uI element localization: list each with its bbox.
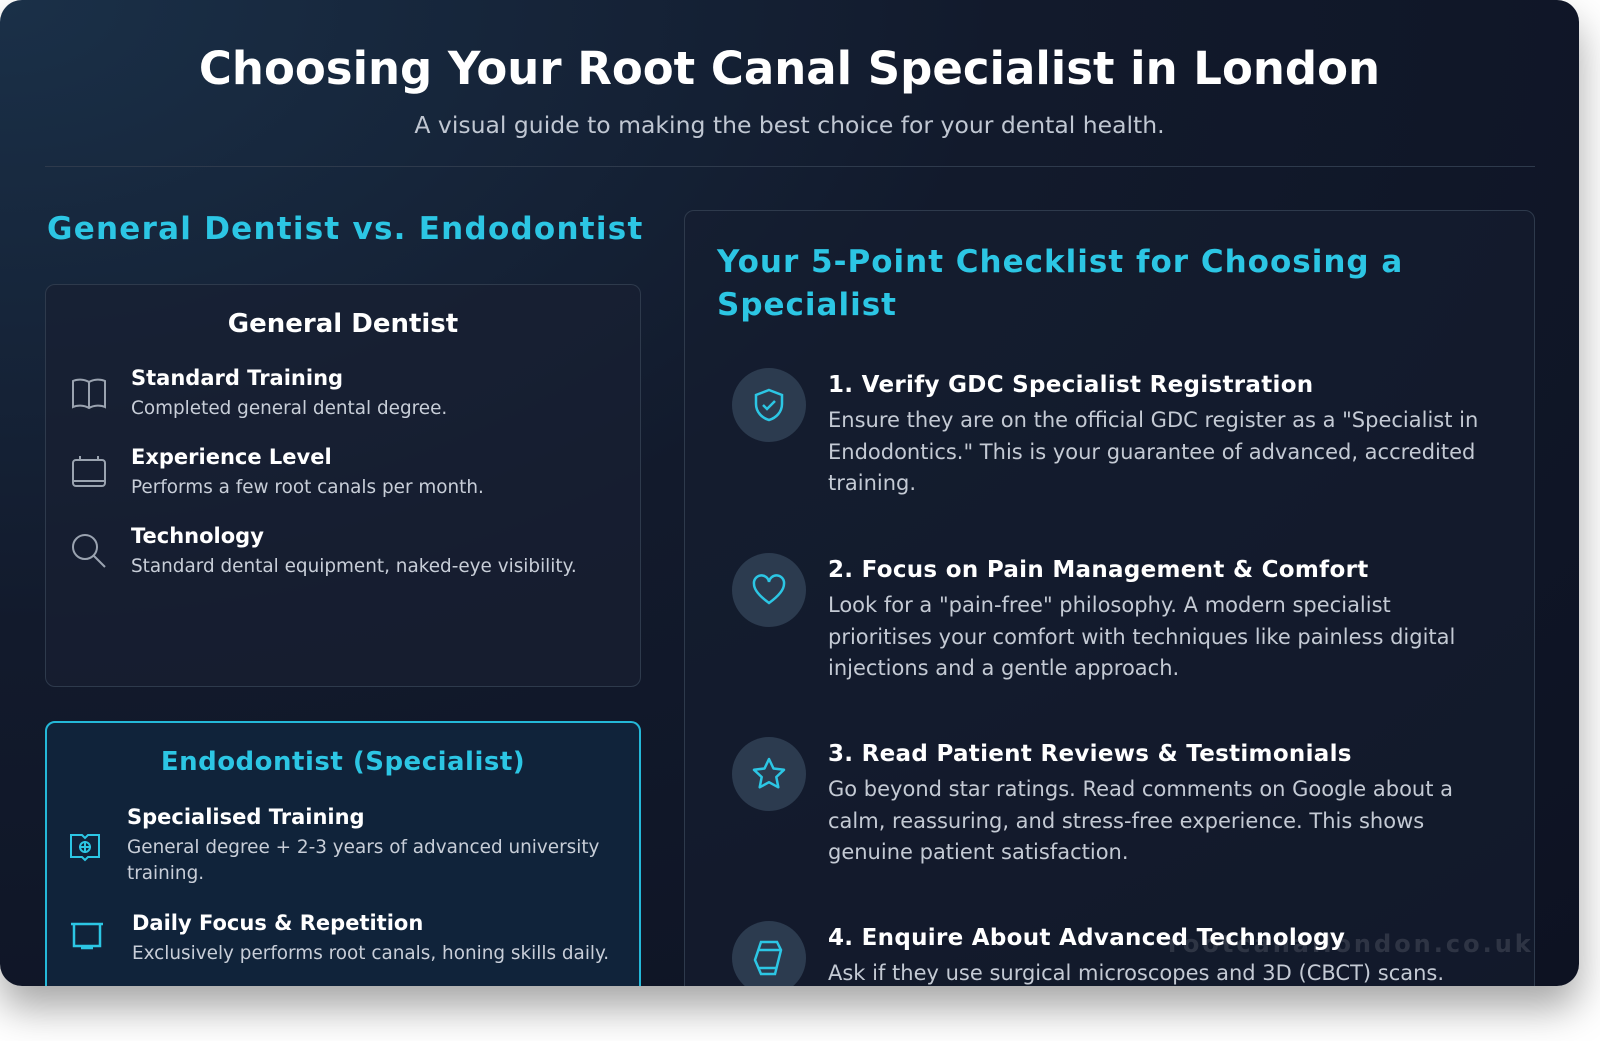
checklist item 3 xyxy=(732,737,1453,864)
checklist item 4: Ask if they use surgical microscopes and 3D (CBCT) scans. xyxy=(828,961,1444,985)
icon: tray xyxy=(71,922,103,950)
watermark: rootcanallondon.co.uk xyxy=(1168,930,1534,958)
item: daily focus: Daily Focus & Repetition xyxy=(132,911,423,935)
item: specialised training xyxy=(70,805,599,884)
item: technology: Standard dental equipment, naked-eye visibility. xyxy=(131,556,577,577)
heading: general dentist: General Dentist xyxy=(228,309,458,339)
item: specialised training: General degree + 2-3 years of advanced university training. xyxy=(127,837,599,884)
item: experience: Performs a few root canals per month. xyxy=(131,477,484,498)
checklist item 1: Ensure they are on the official GDC register as a "Specialist in Endodontics." This is your guarantee of advanced, accredited training. xyxy=(828,408,1478,495)
icon: book with cross xyxy=(70,834,100,862)
icon: heart xyxy=(732,553,806,627)
panel: general dentist xyxy=(45,284,641,687)
checklist item 4: 4. Enquire About Advanced Technology xyxy=(828,925,1345,951)
icon: star xyxy=(732,737,806,811)
item: standard training: Completed general dental degree. xyxy=(131,398,447,419)
panel: checklist xyxy=(684,210,1535,1030)
checklist item 1 xyxy=(732,368,1478,495)
item: daily focus: Exclusively performs root canals, honing skills daily. xyxy=(132,943,609,964)
checklist item 1: 1. Verify GDC Specialist Registration xyxy=(828,372,1313,398)
icon: book xyxy=(72,378,106,409)
icon: tablet xyxy=(72,456,106,487)
heading: comparison: General Dentist vs. Endodontist xyxy=(47,211,644,247)
item: specialised training: Specialised Training xyxy=(127,805,365,829)
item: technology xyxy=(72,524,577,577)
icon: shield xyxy=(732,368,806,442)
checklist item 2: Look for a "pain-free" philosophy. A modern specialist prioritises your comfort with techniques like painless digital injections and a gentle approach. xyxy=(828,593,1455,680)
item: daily focus xyxy=(71,911,609,964)
heading: checklist: Your 5-Point Checklist for Choosing a Specialist xyxy=(717,244,1403,323)
checklist item 4 xyxy=(732,921,1444,986)
checklist item 2 xyxy=(732,553,1455,680)
item: standard training: Standard Training xyxy=(131,366,343,390)
title: Choosing Your Root Canal Specialist in London xyxy=(199,42,1380,95)
checklist item 3: 3. Read Patient Reviews & Testimonials xyxy=(828,741,1352,767)
checklist item 3: Go beyond star ratings. Read comments on Google about a calm, reassuring, and stress-free experience. This shows genuine patient satisfaction. xyxy=(828,777,1453,864)
icon: microscope box xyxy=(732,921,806,995)
icon: magnifier xyxy=(72,534,106,568)
item: experience xyxy=(72,445,484,498)
panel: endodontist xyxy=(45,721,641,1041)
subtitle: A visual guide to making the best choice for your dental health. xyxy=(414,111,1165,139)
checklist item 2: 2. Focus on Pain Management & Comfort xyxy=(828,557,1369,583)
heading: endodontist: Endodontist (Specialist) xyxy=(161,747,525,777)
item: technology: Technology xyxy=(131,524,264,548)
item: experience: Experience Level xyxy=(131,445,332,469)
item: standard training xyxy=(72,366,447,419)
